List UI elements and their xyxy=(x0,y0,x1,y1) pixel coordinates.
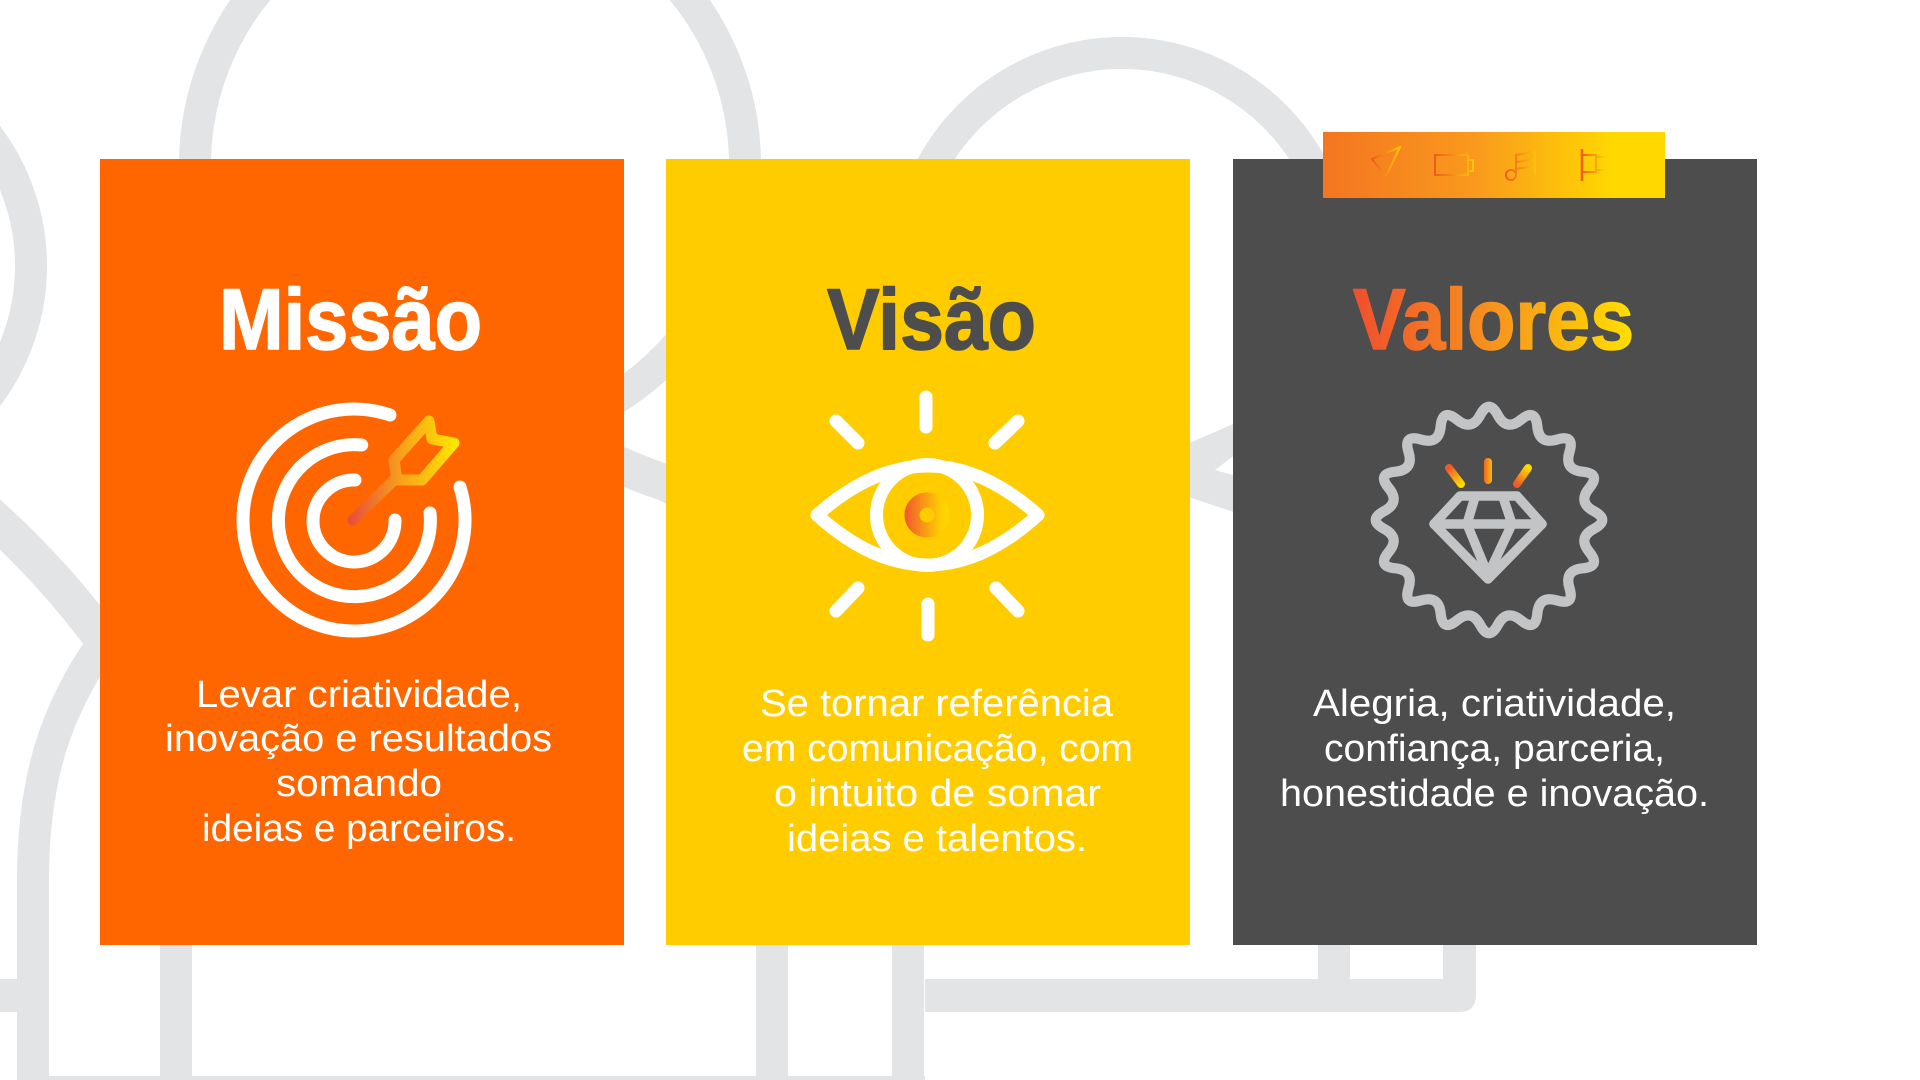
heading: Missão: Missão xyxy=(219,272,482,368)
text: Visão description xyxy=(742,683,1133,860)
icon: mug xyxy=(1435,155,1473,175)
icon: diamond badge xyxy=(1376,407,1602,633)
text: Visão description: em comunicação, com xyxy=(742,728,1133,770)
text: Visão description: Se tornar referência xyxy=(760,683,1114,725)
text: Visão description: ideias e talentos. xyxy=(787,818,1087,860)
heading: Valores: Valores xyxy=(1353,272,1634,368)
background: outlined people illustration xyxy=(0,0,1476,1080)
text: Missão description: somando xyxy=(276,763,442,805)
panel: Valores xyxy=(1233,159,1757,945)
heading: Visão: Visão xyxy=(827,272,1036,368)
panel: Missão xyxy=(100,159,624,945)
text: Missão description xyxy=(165,674,552,850)
text: Valores description xyxy=(1280,683,1709,815)
icon: target with arrow xyxy=(243,409,465,631)
icon: flag xyxy=(1582,149,1606,181)
text: Valores description: Alegria, criatividade, xyxy=(1313,683,1676,725)
icon: music note xyxy=(1506,152,1535,180)
tab: gradient banner with small icons xyxy=(1323,132,1665,198)
icon: eye with rays xyxy=(817,397,1038,635)
text: Missão description: Levar criatividade, xyxy=(196,674,522,716)
text: Missão description: ideias e parceiros. xyxy=(202,808,516,850)
text: Visão description: o intuito de somar xyxy=(774,773,1101,815)
panel: Visão xyxy=(666,159,1190,945)
text: Missão description: inovação e resultados xyxy=(165,718,552,760)
text: Valores description: confiança, parceria, xyxy=(1324,728,1665,770)
text: Valores description: honestidade e inovação. xyxy=(1280,773,1709,815)
icon: megaphone xyxy=(1372,147,1400,176)
